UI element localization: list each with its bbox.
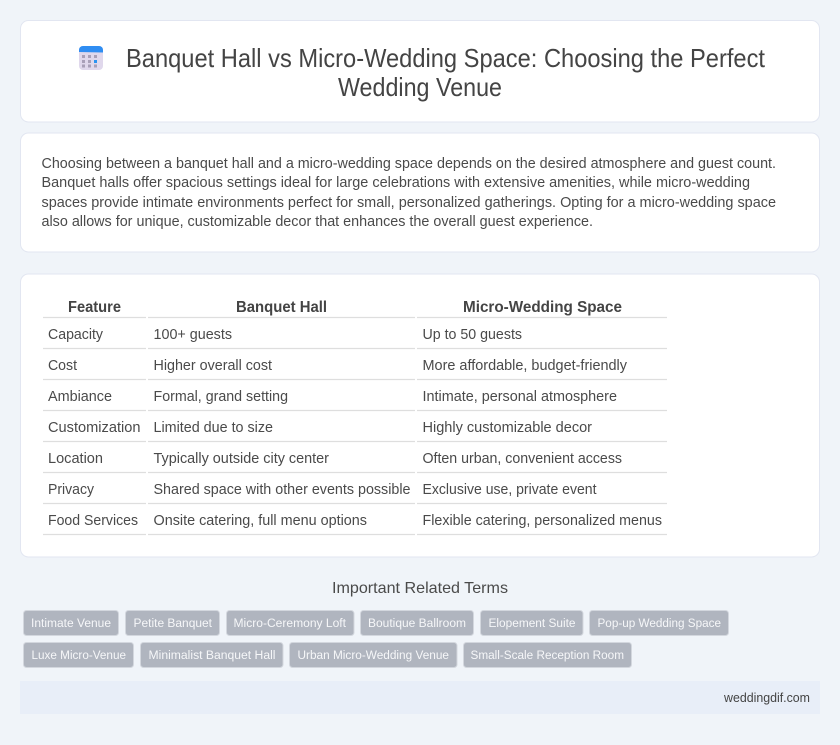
tag: urban micro-wedding venue: Urban Micro-Wedding Venue	[298, 648, 449, 662]
title: Wedding Venue	[338, 74, 502, 102]
row: customization: Highly customizable decor	[422, 420, 592, 436]
row: cost	[48, 358, 628, 374]
tag: pop-up wedding space: Pop-up Wedding Space	[598, 616, 721, 630]
row: location: Location	[48, 451, 103, 467]
icon: calendar	[79, 46, 103, 70]
row: location	[48, 451, 622, 467]
intro paragraph	[42, 156, 776, 230]
tag: elopement suite: Elopement Suite	[488, 616, 576, 630]
tag: urban micro-wedding venue	[290, 642, 457, 668]
row: ambiance	[48, 389, 617, 405]
row: food services: Flexible catering, personalized menus	[422, 513, 662, 529]
row: food services: Onsite catering, full menu options	[154, 513, 367, 529]
row: privacy: Exclusive use, private event	[422, 482, 596, 498]
row: ambiance: Intimate, personal atmosphere	[422, 389, 617, 405]
row: customization: Customization	[48, 420, 140, 436]
row: capacity: Capacity	[48, 327, 104, 343]
footer bar	[20, 681, 820, 714]
row: capacity: Up to 50 guests	[422, 327, 522, 343]
row: food services	[48, 513, 662, 529]
related terms tags	[24, 610, 728, 668]
row: ambiance: Ambiance	[48, 389, 112, 405]
heading: related terms: Important Related Terms	[332, 580, 508, 597]
title	[126, 45, 765, 102]
row: cost: Higher overall cost	[154, 358, 272, 374]
row: privacy: Privacy	[48, 482, 95, 498]
title: Banquet Hall vs Micro-Wedding Space: Choosing the Perfect	[126, 45, 765, 73]
row: location: Typically outside city center	[154, 451, 329, 467]
tag: boutique ballroom: Boutique Ballroom	[368, 616, 466, 630]
tag: micro-ceremony loft	[226, 610, 354, 636]
row: privacy	[48, 482, 596, 498]
panel: introduction	[20, 133, 820, 252]
intro paragraph: also allows for unique, customizable decor that enhances the overall guest experience.	[42, 214, 593, 230]
row: food services: Food Services	[48, 513, 138, 529]
intro paragraph: spaces provide intimate environments perfect for small, personalized gatherings. Opting for a micro-wedding space	[42, 195, 776, 211]
tag: luxe micro-venue	[24, 642, 134, 668]
tag: minimalist banquet hall: Minimalist Banquet Hall	[148, 648, 276, 662]
tag: small-scale reception room: Small-Scale Reception Room	[470, 648, 624, 662]
table header: Feature	[68, 299, 121, 316]
tag: pop-up wedding space	[590, 610, 728, 636]
row: cost: More affordable, budget-friendly	[422, 358, 628, 374]
tag: micro-ceremony loft: Micro-Ceremony Loft	[234, 616, 347, 630]
tag: intimate venue: Intimate Venue	[31, 616, 111, 630]
row: ambiance: Formal, grand setting	[154, 389, 288, 405]
row: cost: Cost	[48, 358, 77, 374]
row: capacity: 100+ guests	[154, 327, 232, 343]
table header: Banquet Hall	[236, 299, 327, 316]
panel: title card	[20, 20, 820, 122]
intro paragraph: Choosing between a banquet hall and a micro-wedding space depends on the desired atmosphere and guest count.	[42, 156, 776, 172]
tag: boutique ballroom	[360, 610, 474, 636]
table header: Micro-Wedding Space	[463, 299, 622, 316]
tag: minimalist banquet hall	[140, 642, 283, 668]
intro paragraph: Banquet halls offer spacious settings ideal for large celebrations with extensive amenities, while micro-wedding	[42, 175, 750, 191]
row: location: Often urban, convenient access	[422, 451, 622, 467]
tag: petite banquet	[126, 610, 220, 636]
tag: intimate venue	[24, 610, 118, 636]
tag: elopement suite	[480, 610, 583, 636]
row: privacy: Shared space with other events possible	[154, 482, 410, 498]
tag: small-scale reception room	[464, 642, 632, 668]
row: capacity	[48, 327, 522, 343]
panel: comparison table	[20, 274, 820, 557]
row: customization	[48, 420, 592, 436]
tag: petite banquet: Petite Banquet	[134, 616, 213, 630]
footer site name: weddingdif.com	[723, 691, 810, 705]
table header	[68, 299, 622, 316]
tag: luxe micro-venue: Luxe Micro-Venue	[32, 648, 126, 662]
row: customization: Limited due to size	[154, 420, 273, 436]
